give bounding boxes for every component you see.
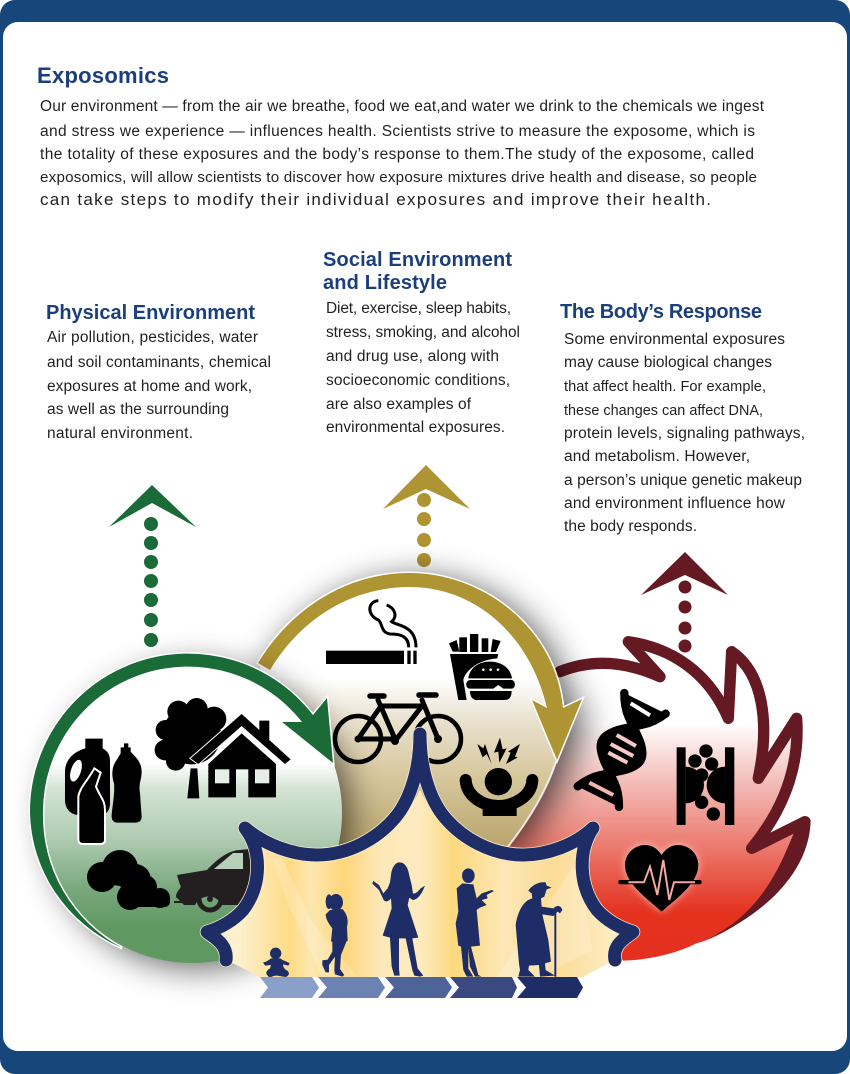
text: the body's response: Some environmental exposures: [564, 331, 785, 348]
text: physical environment: [47, 329, 271, 442]
arrow: dark red dotted up arrow: [641, 552, 728, 652]
intro paragraph: and stress we experience — influences health. Scientists strive to measure the exposome, which is: [40, 123, 755, 140]
figure: baby: [263, 948, 290, 977]
icon: tree: [155, 698, 226, 798]
icon: cell transport: [677, 744, 734, 825]
text: physical environment: as well as the surrounding: [47, 401, 229, 418]
heading: physical environment: Physical Environment: [46, 302, 255, 324]
intro paragraph: exposomics, will allow scientists to discover how exposure mixtures drive health and disease, so people: [40, 169, 757, 186]
arrow: green circular arrow: [30, 654, 333, 948]
intro paragraph: can take steps to modify their individual exposures and improve their health.: [40, 190, 711, 209]
text: the body's response: the body responds.: [564, 518, 697, 535]
text: the body's response: and metabolism. However,: [564, 448, 750, 465]
text: the body's response: and environment influence how: [564, 495, 786, 512]
figure: woman: [372, 862, 425, 977]
icon: dna helix: [578, 693, 666, 807]
text: social environment: are also examples of: [326, 396, 472, 413]
text: the body's response: may cause biological changes: [564, 354, 772, 371]
icon: heart with pulse: [618, 845, 702, 912]
figure: elderly woman: [516, 882, 562, 977]
panel: life stages canopy: [207, 734, 633, 977]
icon: household chemical bottles: [65, 739, 142, 844]
heading: social environment and lifestyle: Social Environment: [323, 249, 512, 271]
icon: cigarette and smoke: [326, 601, 417, 664]
text: physical environment: natural environment.: [47, 425, 193, 442]
text: physical environment: and soil contaminants, chemical: [47, 354, 271, 371]
intro paragraph: Our environment — from the air we breathe, food we eat,and water we drink to the chemicals we ingest: [40, 98, 765, 115]
flame: body's response: [503, 642, 811, 961]
text: the body's response: protein levels, signaling pathways,: [564, 425, 805, 442]
heading: social environment and lifestyle: [323, 249, 512, 294]
title: Exposomics: [37, 63, 169, 88]
text: social environment: and drug use, along with: [326, 348, 499, 365]
panel: physical environment circle: [30, 654, 349, 968]
text: social environment: socioeconomic conditions,: [326, 372, 510, 389]
icon: car: [174, 848, 258, 910]
arrow: green dotted up arrow: [109, 485, 196, 647]
text: social environment: stress, smoking, and alcohol: [326, 324, 520, 341]
intro paragraph: the totality of these exposures and the body’s response to them.The study of the exposome, called: [40, 146, 754, 163]
text: physical environment: exposures at home and work,: [47, 378, 252, 395]
text: the body's response: that affect health. For example,: [564, 379, 766, 395]
figure: businesswoman: [456, 868, 494, 977]
heading: social environment and lifestyle: and Lifestyle: [323, 272, 447, 294]
icon: exhaust cloud: [87, 850, 170, 910]
text: the body's response: these changes can affect DNA,: [564, 403, 763, 419]
panel: social environment circle: [258, 573, 590, 856]
text: physical environment: Air pollution, pesticides, water: [47, 329, 258, 346]
intro paragraph: [40, 98, 765, 209]
heading: the body's response: The Body’s Response: [560, 301, 762, 323]
text: social environment: [326, 300, 520, 436]
text: the body's response: [564, 331, 805, 535]
icon: house: [191, 714, 291, 797]
text: social environment: environmental exposures.: [326, 419, 505, 436]
figure: girl: [322, 894, 348, 977]
text: social environment: Diet, exercise, sleep habits,: [326, 300, 511, 317]
icon: fries and burger: [449, 634, 515, 700]
canopy outline: [207, 734, 633, 960]
icon: bicycle: [335, 695, 461, 762]
text: the body's response: a person’s unique genetic makeup: [564, 472, 802, 489]
arrow: gold circular arrow: [258, 573, 582, 760]
arrow: gold dotted up arrow: [383, 465, 470, 567]
icon: stress: [466, 738, 532, 816]
life-stage chevrons: [260, 977, 583, 998]
